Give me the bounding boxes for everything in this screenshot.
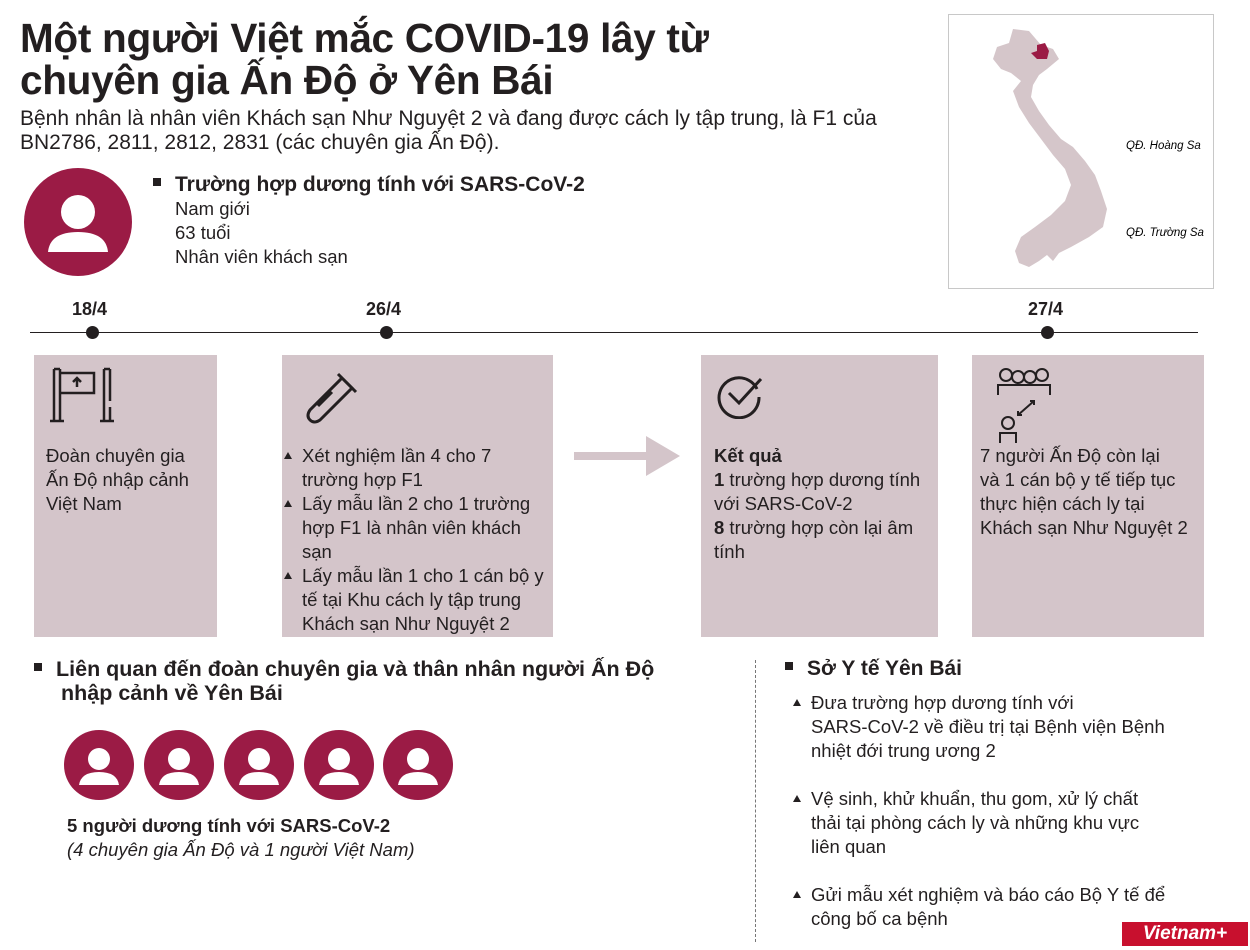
timeline <box>30 299 1198 339</box>
related heading: Liên quan đến đoàn chuyên gia và thân nhân người Ấn Độ <box>56 657 654 681</box>
panel 2: Lấy mẫu lần 2 cho 1 trường hợp F1 là nhân viên khách sạn <box>302 493 530 562</box>
subtitle <box>20 107 877 154</box>
panel 2: Lấy mẫu lần 1 cho 1 cán bộ y tế tại Khu cách ly tập trung Khách sạn Như Nguyệt 2 <box>302 565 544 634</box>
logo <box>1122 922 1248 946</box>
health dept: liên quan <box>811 836 886 857</box>
health dept: Đưa trường hợp dương tính với <box>811 692 1074 713</box>
health dept: Gửi mẫu xét nghiệm và báo cáo Bộ Y tế để <box>811 884 1165 905</box>
panel 4: 7 người Ấn Độ còn lại <box>980 445 1160 466</box>
health dept: thải tại phòng cách ly và những khu vực <box>811 812 1139 833</box>
panel 2 <box>282 355 553 637</box>
panel 3: 1 trường hợp dương tính với SARS-CoV-2 <box>714 469 920 514</box>
patient info: Nam giới <box>175 198 250 219</box>
map <box>948 14 1214 289</box>
subtitle: BN2786, 2811, 2812, 2831 (các chuyên gia Ấn Độ). <box>20 131 499 154</box>
panel 4: thực hiện cách ly tại <box>980 493 1145 514</box>
title: Một người Việt mắc COVID-19 lây từ <box>20 15 709 61</box>
related heading: nhập cảnh về Yên Bái <box>61 681 283 705</box>
timeline: 26/4 <box>366 299 401 319</box>
timeline: 18/4 <box>72 299 107 319</box>
panel 4: và 1 cán bộ y tế tiếp tục <box>980 469 1175 490</box>
positive count: 5 người dương tính với SARS-CoV-2 <box>67 815 390 836</box>
panel 1 <box>34 355 217 637</box>
avatars row <box>64 730 453 800</box>
patient avatar <box>24 168 132 276</box>
related heading <box>34 657 654 705</box>
arrow <box>574 436 680 476</box>
panel 3: 8 trường hợp còn lại âm tính <box>714 517 913 562</box>
map: QĐ. Trường Sa <box>1126 227 1204 239</box>
health dept: Sở Y tế Yên Bái <box>807 657 962 680</box>
health dept <box>785 657 1165 929</box>
panel 1: Ấn Độ nhập cảnh <box>46 469 189 490</box>
title: chuyên gia Ấn Độ ở Yên Bái <box>20 57 553 103</box>
positive count: (4 chuyên gia Ấn Độ và 1 người Việt Nam) <box>67 839 415 860</box>
patient info <box>153 173 585 267</box>
logo: Vietnam+ <box>1143 923 1227 944</box>
patient info: Trường hợp dương tính với SARS-CoV-2 <box>175 173 585 196</box>
panel 3 <box>701 355 938 637</box>
map: QĐ. Hoàng Sa <box>1126 140 1201 152</box>
panel 1: Đoàn chuyên gia <box>46 445 185 466</box>
panel 2: Xét nghiệm lần 4 cho 7 trường hợp F1 <box>302 445 491 490</box>
panel 1: Việt Nam <box>46 493 122 514</box>
icon: check <box>718 376 762 419</box>
positive count <box>67 815 415 860</box>
timeline: 27/4 <box>1028 299 1063 319</box>
patient info: Nhân viên khách sạn <box>175 246 348 267</box>
icon: people <box>997 368 1051 443</box>
icon: gate <box>50 368 114 422</box>
health dept: SARS-CoV-2 về điều trị tại Bệnh viện Bệnh <box>811 716 1165 737</box>
health dept: công bố ca bệnh <box>811 908 948 929</box>
panel 4 <box>972 355 1204 637</box>
icon: test tube <box>306 373 357 424</box>
health dept: Vệ sinh, khử khuẩn, thu gom, xử lý chất <box>811 788 1138 809</box>
patient info: 63 tuổi <box>175 222 231 243</box>
panel 3: Kết quả <box>714 445 782 466</box>
title <box>20 15 709 103</box>
health dept: nhiệt đới trung ương 2 <box>811 740 996 761</box>
panel 4: Khách sạn Như Nguyệt 2 <box>980 517 1188 538</box>
subtitle: Bệnh nhân là nhân viên Khách sạn Như Nguyệt 2 và đang được cách ly tập trung, là F1 của <box>20 107 877 130</box>
